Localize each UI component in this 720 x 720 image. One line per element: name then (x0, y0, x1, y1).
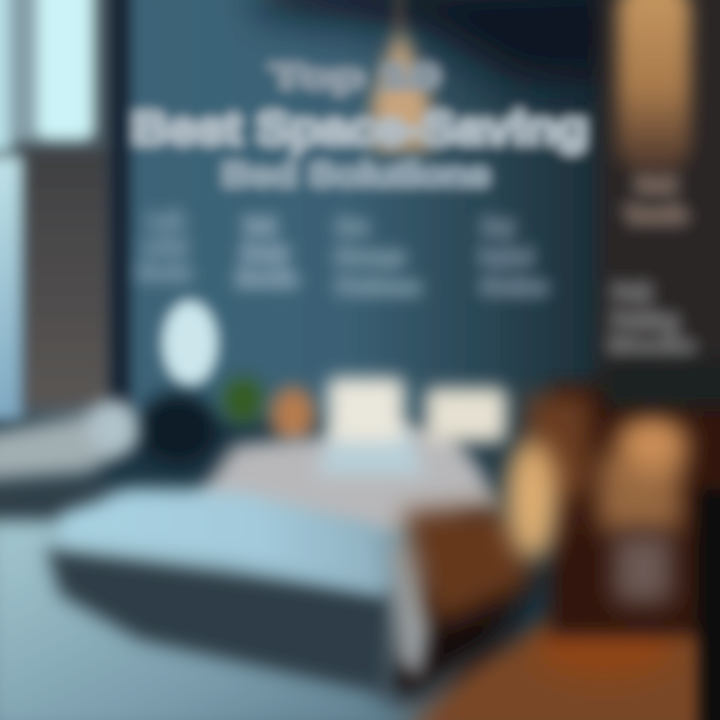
duvet (60, 490, 388, 595)
duvet corner (388, 540, 430, 680)
floor and wood (0, 500, 720, 720)
feature: murphy beds: Murphy (241, 240, 289, 265)
feature: storage platform: Store (336, 214, 368, 239)
window and curtain (0, 0, 115, 420)
feature: lofted beds: Beds (139, 260, 191, 285)
warm headboard glow (506, 440, 558, 560)
feature: daybed: Daybed (479, 244, 533, 269)
bed base shadow (385, 560, 540, 700)
pillows (328, 378, 506, 442)
feature: lofted beds: Loft (148, 208, 183, 233)
feature: trundle beds: Trundle (625, 202, 687, 227)
feature: folding beds: Beds (610, 334, 694, 359)
feature: storage platform (335, 214, 420, 299)
right dark panel with wall light (598, 0, 720, 410)
feature: lofted beds: Lofted (143, 234, 187, 259)
feature: trundle beds (625, 172, 687, 227)
bedside orange lamp (271, 387, 315, 443)
feature: murphy beds: Wall (244, 214, 276, 239)
feature: daybed (479, 214, 547, 299)
feature: murphy beds (237, 214, 297, 291)
right nightstand (525, 360, 720, 720)
feature: daybed: Sofas (481, 274, 547, 299)
top wall shade (260, 0, 640, 85)
feature: folding beds: Folding (612, 308, 678, 333)
round wall lamp (162, 300, 218, 386)
feature: daybed: Day (482, 214, 515, 239)
feature: murphy beds: Beds (237, 266, 297, 291)
plant (223, 378, 263, 422)
infographic title: Best Space-Saving (132, 102, 588, 154)
feature: trundle beds: Bunk (636, 172, 677, 197)
infographic title: Bed Solutions (222, 156, 490, 194)
feature: folding beds (610, 280, 694, 359)
infographic title: Top 10 (270, 58, 440, 96)
infographic title (132, 58, 588, 194)
pendant lamp (372, 0, 432, 150)
feature: lofted beds (139, 208, 191, 285)
bed (46, 420, 558, 700)
feature: folding beds: Fold (613, 280, 651, 305)
feature: storage platform: Storage (335, 244, 405, 269)
feature: storage platform: Platforms (336, 274, 420, 299)
bed front panel (46, 548, 395, 695)
dark blue vase shadow (138, 392, 218, 464)
brown throw (402, 505, 530, 625)
left side table (0, 402, 136, 520)
feature text blocks (139, 172, 694, 359)
dark column beside window (110, 0, 130, 410)
sheet top (190, 420, 500, 530)
